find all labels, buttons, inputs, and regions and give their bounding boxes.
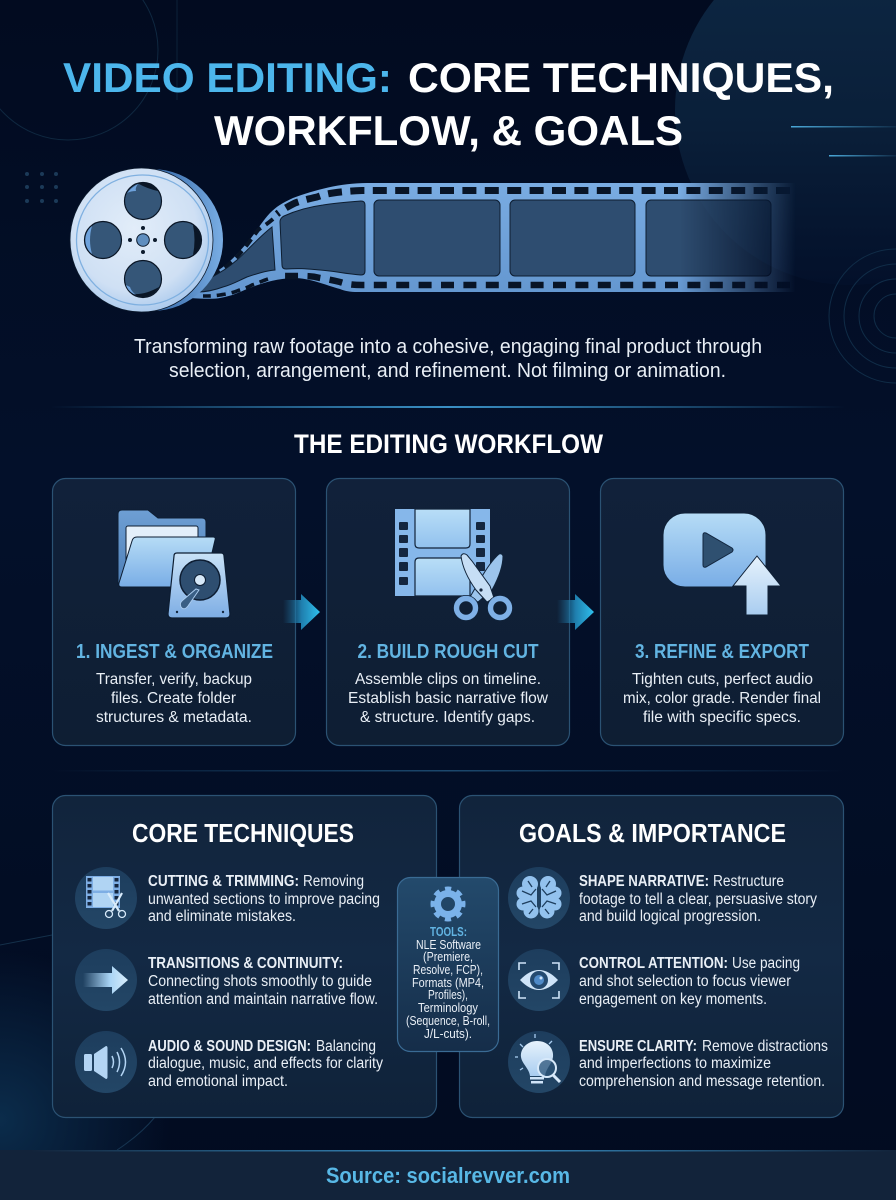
icon: film and scissors	[395, 509, 510, 618]
technique: cutting and trimming: unwanted sections to improve pacing	[148, 891, 380, 908]
technique: transitions and continuity: TRANSITIONS & CONTINUITY:	[148, 955, 343, 972]
goal: ensure clarity	[579, 1038, 828, 1090]
step title: 3. REFINE & EXPORT	[635, 640, 809, 663]
step description: files. Create folder	[111, 690, 237, 707]
technique: audio and sound design: and emotional impact.	[148, 1073, 288, 1090]
film reel illustration	[70, 168, 223, 312]
technique: audio and sound design: Balancing	[316, 1038, 376, 1055]
step title: 2. BUILD ROUGH CUT	[358, 640, 539, 663]
goal: control attention: Use pacing	[732, 955, 800, 972]
goal: ensure clarity: ENSURE CLARITY:	[579, 1038, 697, 1055]
tools list: NLE Software	[416, 938, 481, 952]
step description	[348, 671, 548, 726]
icon: play button with upload arrow	[663, 513, 781, 615]
step title: 1. INGEST & ORGANIZE	[76, 640, 273, 663]
step description: Establish basic narrative flow	[348, 690, 548, 707]
heading: goals and importance: GOALS & IMPORTANCE	[519, 818, 786, 848]
step description: & structure. Identify gaps.	[360, 709, 535, 726]
goal: ensure clarity: comprehension and message retention.	[579, 1073, 825, 1090]
intro text: selection, arrangement, and refinement. Not filming or animation.	[169, 360, 726, 382]
goal: shape narrative: SHAPE NARRATIVE:	[579, 873, 709, 890]
goal: control attention: CONTROL ATTENTION:	[579, 955, 728, 972]
goal: shape narrative: footage to tell a clear, persuasive story	[579, 891, 817, 908]
goal: control attention	[579, 955, 800, 1008]
technique: cutting and trimming: CUTTING & TRIMMING:	[148, 873, 299, 890]
icon: folder and hard drive	[118, 510, 230, 618]
technique: transitions and continuity: attention and maintain narrative flow.	[148, 991, 378, 1008]
arrow: step 1 to step 2	[283, 594, 320, 630]
icon: film and scissors	[75, 867, 137, 929]
technique: transitions and continuity: Connecting shots smoothly to guide	[148, 973, 372, 990]
step description: Transfer, verify, backup	[96, 671, 252, 688]
callout: tools	[398, 878, 498, 1052]
goal: ensure clarity: Remove distractions	[702, 1038, 828, 1055]
intro text	[134, 336, 762, 382]
icon: brain	[508, 867, 570, 929]
tools list: (Premiere,	[423, 950, 473, 964]
technique: cutting and trimming: Removing	[303, 873, 364, 890]
icon: transition arrow	[75, 949, 137, 1011]
tools list: (Sequence, B-roll,	[406, 1014, 490, 1028]
step description: Tighten cuts, perfect audio	[632, 671, 813, 688]
step description: structures & metadata.	[96, 709, 252, 726]
icon: eye with focus brackets	[508, 949, 570, 1011]
icon: light bulb with magnifier	[508, 1031, 570, 1093]
source credit: Source: socialrevver.com	[326, 1163, 570, 1188]
panel: step 2 build rough cut	[326, 478, 570, 746]
panel: step 3 refine and export	[600, 478, 844, 746]
tools heading: TOOLS:	[430, 925, 467, 939]
technique: audio and sound design: AUDIO & SOUND DESIGN:	[148, 1038, 311, 1055]
footer	[0, 1150, 896, 1200]
technique: transitions and continuity	[148, 955, 378, 1008]
icon: gear	[433, 889, 463, 919]
film strip illustration	[190, 183, 796, 299]
technique: audio and sound design	[148, 1038, 383, 1090]
goal: shape narrative: Restructure	[713, 873, 784, 890]
goal: control attention: engagement on key moments.	[579, 991, 767, 1008]
step description: Assemble clips on timeline.	[355, 671, 541, 688]
technique: cutting and trimming	[148, 873, 380, 925]
intro text: Transforming raw footage into a cohesive, engaging final product through	[134, 336, 762, 358]
tools list: Terminology	[418, 1001, 479, 1015]
step description	[623, 671, 821, 726]
heading: the editing workflow: THE EDITING WORKFLOW	[294, 429, 603, 459]
technique: cutting and trimming: and eliminate mistakes.	[148, 908, 296, 925]
goal: control attention: and shot selection to focus viewer	[579, 973, 791, 990]
tools list: Profiles),	[428, 988, 468, 1002]
title: VIDEO EDITING:	[63, 54, 392, 101]
technique: audio and sound design: dialogue, music, and effects for clarity	[148, 1055, 383, 1072]
tools list: Resolve, FCP),	[413, 963, 483, 977]
title: CORE TECHNIQUES,	[408, 54, 834, 101]
panel: core techniques	[52, 796, 436, 1118]
panel: goals and importance	[460, 796, 844, 1118]
title	[63, 54, 834, 154]
tools list: Formats (MP4,	[412, 976, 484, 990]
icon: speaker	[75, 1031, 137, 1093]
tools list: J/L-cuts).	[424, 1027, 472, 1041]
arrow: step 2 to step 3	[557, 594, 594, 630]
goal: shape narrative	[579, 873, 817, 925]
heading: core techniques: CORE TECHNIQUES	[132, 818, 354, 848]
step description	[96, 671, 252, 726]
title: WORKFLOW, & GOALS	[214, 107, 683, 154]
panel: step 1 ingest and organize	[52, 478, 296, 746]
step description: file with specific specs.	[643, 709, 801, 726]
goal: ensure clarity: and imperfections to maximize	[579, 1055, 771, 1072]
step description: mix, color grade. Render final	[623, 690, 821, 707]
goal: shape narrative: and build logical progression.	[579, 908, 761, 925]
tools list	[406, 938, 490, 1041]
